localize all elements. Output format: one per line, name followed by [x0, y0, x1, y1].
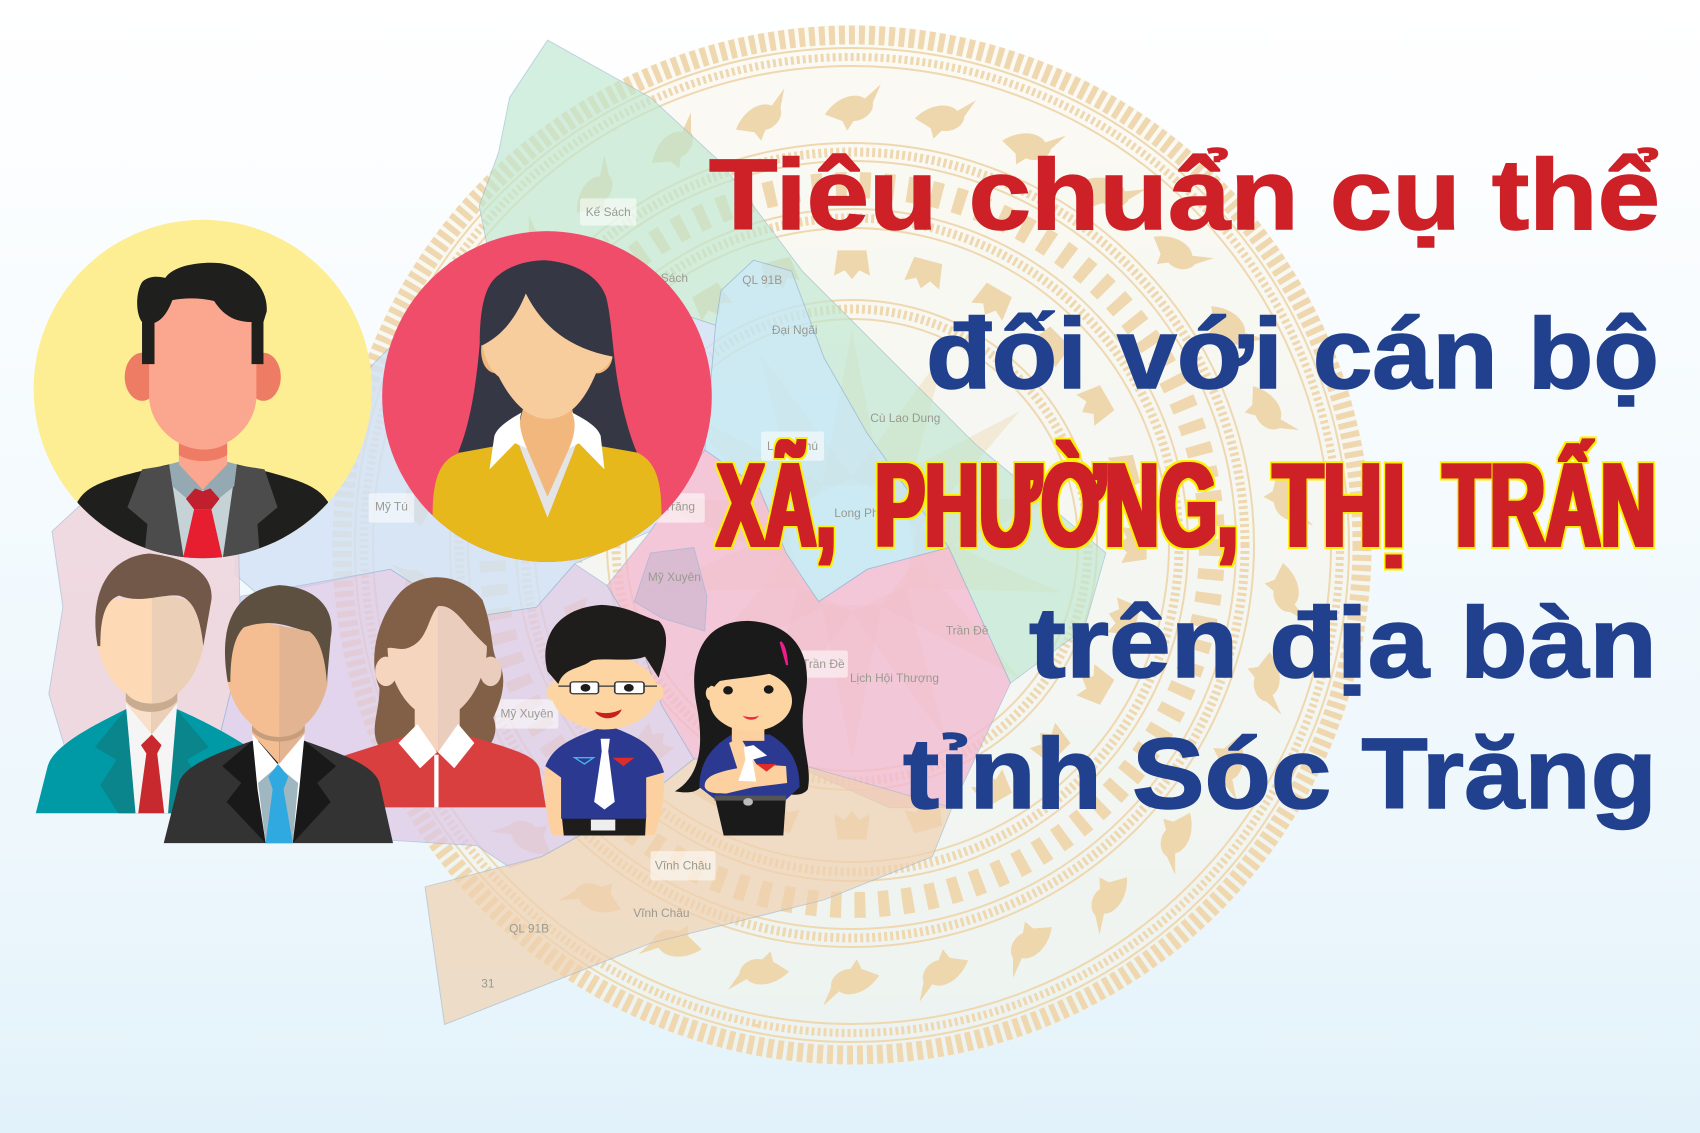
label: My Tu: Mỹ Tú: [375, 500, 408, 514]
title line 3 highlighted: XÃ,: [717, 439, 836, 572]
title line 2: đối với cán bộ: [926, 298, 1659, 410]
map region: Long Phu blue: [705, 260, 949, 602]
avatar: man in teal suit: [36, 554, 255, 813]
label: My Xuyen: Mỹ Xuyên: [500, 707, 553, 721]
place names: QL 91B: [509, 921, 549, 935]
map region: centre purple: [217, 564, 694, 867]
label: Ke Sach: [580, 198, 636, 226]
place names: Đại Ngãi: [772, 323, 818, 337]
avatar: youth union boy: [544, 605, 666, 836]
title line 4: trên địa bàn: [1029, 587, 1657, 699]
label: Soc Trang: [651, 493, 705, 523]
place names: [481, 271, 989, 991]
place names: Sách: [661, 271, 688, 285]
map region: west pink: [49, 504, 241, 748]
place names: QL 91B: [742, 273, 782, 287]
title line 1: Tiêu chuẩn cụ thể: [709, 139, 1660, 251]
label: Ke Sach: Kế Sách: [586, 205, 631, 219]
place names: Vĩnh Châu: [633, 906, 689, 920]
map region: Tran De pink: [607, 450, 1010, 808]
label: Soc Trang: Trăng: [664, 500, 695, 514]
label: Vinh Chau: Vĩnh Châu: [655, 859, 711, 873]
map region: Soc Trang city: [634, 548, 707, 631]
avatar: woman in red top: [344, 577, 546, 807]
title: [709, 139, 1660, 830]
place names: Lịch Hội Thượng: [850, 671, 939, 685]
place names: Trần Đề: [946, 623, 989, 637]
title line 3 highlighted: PHƯỜNG,: [875, 439, 1238, 572]
place names: 31: [481, 977, 495, 991]
avatar: woman on pink circle: [382, 231, 712, 566]
avatar: youth union girl: [675, 621, 809, 836]
avatar: man on yellow circle: [34, 220, 372, 562]
label: Tran De: Trần Đề: [802, 657, 845, 671]
label: Long Phu: Long Phú: [767, 439, 818, 453]
map of Soc Trang province: [49, 40, 1106, 1025]
map region: Vinh Chau peach: [425, 759, 952, 1025]
label: My Tu: [369, 493, 414, 523]
title line 5: tỉnh Sóc Trăng: [903, 718, 1657, 830]
avatar: man in black suit: [164, 585, 393, 843]
title line 3 highlighted: [717, 439, 1656, 572]
place names: Long Phú: [834, 506, 885, 520]
map region: My Tu light blue: [235, 249, 716, 618]
bronze drum emblem: [332, 25, 1372, 1065]
map labels: [369, 198, 989, 991]
label: Vinh Chau: [651, 851, 716, 880]
group of people avatars: [34, 220, 809, 843]
label: My Xuyen: [495, 699, 558, 729]
place names: Mỹ Xuyên: [648, 570, 701, 584]
place names: Cù Lao Dung: [870, 411, 940, 425]
label: Tran De: [797, 651, 848, 678]
label: Long Phu: [761, 432, 824, 461]
title line 3 highlighted: THỊ: [1273, 439, 1405, 572]
map region: north and east green: [479, 40, 1106, 683]
